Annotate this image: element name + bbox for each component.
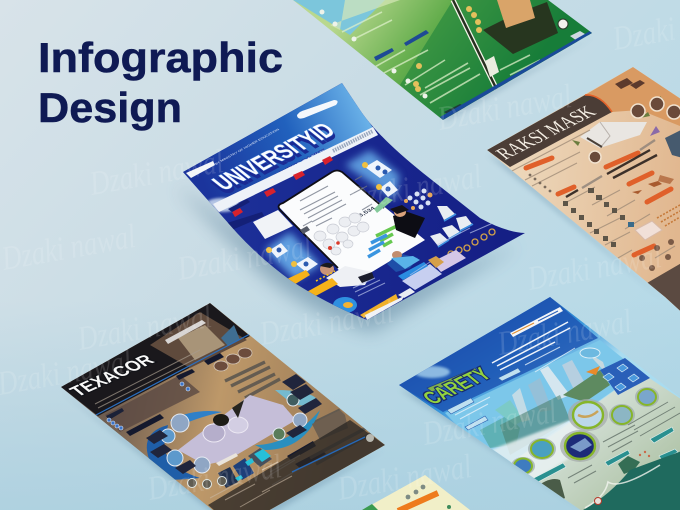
gray callout rows [215,362,372,464]
teal subheading pills [532,427,678,483]
section tabs [126,353,326,468]
blue icon tiles [603,364,639,391]
face mask [580,122,647,148]
poster: University ID [183,83,525,320]
bar chart [218,448,272,488]
diagonal road [453,0,499,90]
footer badge [594,498,602,504]
dark title band [487,95,612,167]
blue footer edge [440,31,592,120]
green ring photos [511,387,659,475]
list thumbnails [563,188,634,247]
price stat: $3,534 [354,206,378,220]
logo tag [186,161,215,178]
green bars [376,226,397,246]
dark green lower panel [400,0,597,122]
QR badge [570,31,588,42]
dark net structure [483,2,558,54]
watermarks: Dzaki nawal [144,448,284,508]
orange stat dots [657,205,680,226]
student figure with cap [387,251,420,272]
note card [635,221,662,240]
navy heading tabs [374,30,429,61]
watermarks: Dzaki nawal [86,143,226,203]
orange crane accent [586,366,600,375]
title: Infographic [38,34,283,81]
poster: Carety [395,290,680,510]
gray heading bars [582,140,655,188]
dark callouts [146,374,322,474]
body text [353,220,500,296]
watermarks: Dzaki nawal [494,303,634,363]
yellow skyline strip [360,294,398,318]
circular category icons [314,213,369,255]
right image cards [430,206,472,246]
header band [183,83,378,208]
heading: RAKSI MASK: RAKSI MASK [492,103,601,163]
dark header [61,303,250,416]
title [38,34,283,131]
heading: UNIVERSITY ID [206,118,342,198]
pale text rows [342,12,540,103]
poster: green infographic (top) [293,0,592,120]
section tabs [447,368,521,430]
list bullets [529,174,551,192]
pop-up form card [253,210,293,239]
left intro section [105,375,200,432]
heading: UNIVERSITY ID: UNIVERSITYID [207,121,342,198]
hexagon chain [448,229,495,257]
badge [398,288,415,298]
red badges [232,156,333,217]
yellow markers [413,6,482,92]
waterfall [221,325,240,346]
rocky photo [150,312,247,368]
blue card icons [276,166,390,266]
orange heading pills [526,153,671,255]
steel rolls [203,400,248,442]
blue header rule [96,334,250,415]
graduate figure [390,205,425,238]
header deep blue [399,297,598,412]
heading: TEXACOR: TEXACOR [65,351,159,400]
dark footer [648,264,680,310]
watermarks: Dzaki nawal [419,393,559,453]
logo pill [297,100,338,119]
top logo row [615,78,645,89]
screen text rows [300,176,372,226]
lower pale panel [500,372,680,510]
title: Design [38,84,182,131]
white screen panel [279,170,425,284]
tan building [497,0,535,28]
dark text bars [566,150,657,197]
round brown stats [214,348,252,371]
circular icons [639,239,674,271]
white chart caption [216,453,238,466]
watermarks: Dzaki nawal [334,448,474,508]
text rows [510,130,675,258]
cyan wing right [255,410,320,450]
yellow stars [316,271,335,281]
QR code [300,226,310,234]
city skyline [480,360,610,455]
hexagon cluster [404,188,432,210]
paragraph lines [455,347,575,419]
person photo [665,130,680,158]
watermarks: Dzaki nawal [256,293,396,353]
schedule tables [398,250,466,290]
red icons [328,241,340,250]
social pill [165,320,206,344]
star fort [618,456,640,474]
gray circles [406,485,425,499]
blue dots [107,382,190,430]
blue sky panel upper [345,150,400,200]
gold dots [266,162,382,267]
green dot [447,505,451,509]
yellow buttons [287,270,338,299]
blue arc left [147,425,200,480]
blue globe chart [333,297,357,313]
navy icon panel [600,358,650,395]
stat panel [312,410,348,440]
leaves and flowers [572,96,664,146]
white floating cards [270,160,398,272]
blue arc upper [170,411,222,428]
small white header text: BY MINISTRY OF HIGHER EDUCATION [214,128,281,166]
green corner [362,504,378,510]
subtitle pill [427,368,478,392]
machine callout circles [161,394,307,473]
bottom stat medallions [188,476,226,488]
poster: cropped yellow sheet [362,475,470,510]
dark teal footer [583,448,680,510]
heading: CARETY: CARETY [417,364,496,408]
Indonesia map [632,175,674,194]
white bottom strip [365,296,404,320]
white pill [510,307,563,337]
legend dots [639,451,650,457]
green ladder chart [374,197,393,213]
green hillside strip [330,0,400,30]
waterfall fade [490,420,590,480]
map of region [535,479,565,502]
footer columns [210,476,292,507]
cloud [205,198,239,212]
presenter figure [320,263,374,287]
white strip [213,127,378,212]
blue card shadows [438,214,473,247]
sky light band [445,340,640,470]
dark body text [568,402,680,483]
watermarks: Dzaki nawal [174,228,314,288]
white round badge [558,19,568,29]
watermarks: Dzaki nawal [0,343,134,403]
group photo [444,104,466,116]
navy subheading tabs [227,199,264,230]
dark footer [208,420,385,510]
blue sky panel lower [265,232,320,280]
cloud glow [414,366,450,378]
round photos [589,97,680,163]
watermarks: Dzaki nawal [0,218,138,278]
lavender machine panel [178,395,296,465]
tower [580,348,607,374]
orange top band [585,67,680,130]
header text rows [95,350,205,408]
heading: UNIVERSITY ID: UNIVERSITYID [206,118,341,195]
blue footer rule [292,437,365,472]
heading: UNIVERSITY ID: GET YOUR CAMPUS EASILY [239,148,330,198]
poster: Raksi Mask [480,60,680,320]
pale rows bottom [262,455,302,485]
blue bars [368,235,387,257]
white circle QR [366,434,374,442]
watermarks: Dzaki nawal [74,298,214,358]
poster: Texacor [55,295,390,510]
watermarks: Dzaki nawal [344,158,484,218]
headline text [492,322,570,370]
orange pill [398,493,438,510]
sky-blue corner band [293,0,385,35]
white step bullets [320,10,428,98]
watermarks: Dzaki nawal [434,78,574,138]
